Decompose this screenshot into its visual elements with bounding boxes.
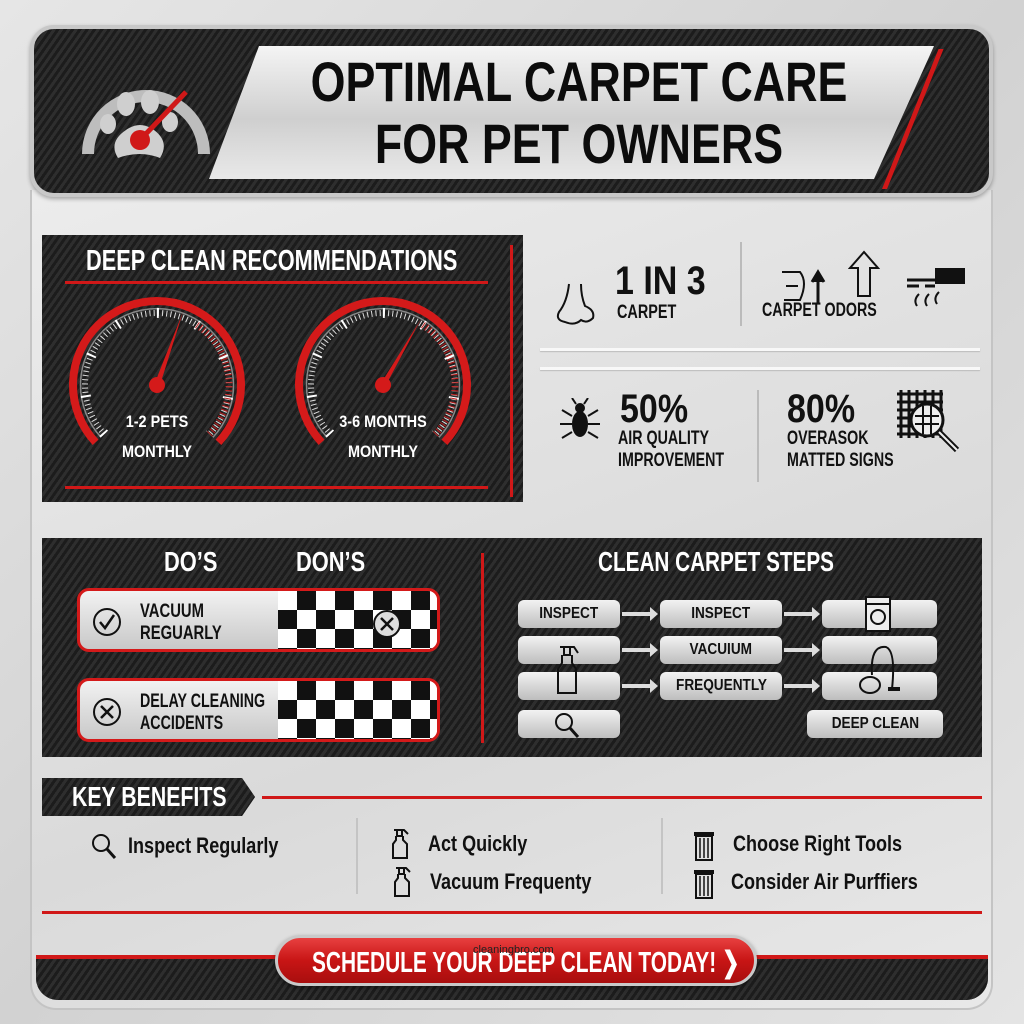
call to action button: cleaningbro.com (473, 944, 554, 956)
steps flow: INSPECT (692, 605, 750, 622)
don't item: delay cleaning accidents: ACCIDENTS (140, 713, 223, 734)
steps flow (518, 596, 943, 738)
gauge: 3-6 months (295, 297, 471, 461)
do item: vacuum regularly: REGUARLY (140, 623, 222, 644)
heading: do's / don's: DO’S (164, 546, 217, 577)
benefit: inspect regularly: Inspect Regularly (128, 833, 278, 858)
title: OPTIMAL CARPET CARE (311, 50, 847, 113)
title: FOR PET OWNERS (375, 112, 783, 175)
gauge: 1-2 pets: 1-2 PETS (126, 413, 188, 431)
footer strip (36, 955, 988, 1000)
icon: paw speedometer (82, 90, 210, 158)
icon: washing machine (865, 596, 891, 632)
stat: 50% (560, 387, 724, 471)
panel: do's and don'ts + steps: DON’S (296, 546, 365, 577)
gauge: 1-2 pets: MONTHLY (122, 443, 192, 461)
do item: vacuum regularly (77, 588, 440, 652)
steps flow: VACUIUM (690, 641, 752, 658)
panel: key benefits list (92, 818, 918, 899)
stat: 50%: 50% (620, 387, 688, 431)
panel: deep clean recommendations (42, 235, 523, 502)
benefit: tools / air purifiers: Choose Right Tools (733, 831, 902, 856)
gauge: 3-6 months: MONTHLY (348, 443, 418, 461)
don't item: delay cleaning accidents: DELAY CLEANING (140, 691, 265, 712)
call to action button: SCHEDULE YOUR DEEP CLEAN TODAY! ❯ (312, 947, 739, 979)
benefit: act quickly / vacuum frequently (392, 829, 592, 897)
stat: 80%: MATTED SIGNS (787, 450, 894, 471)
benefit: tools / air purifiers (694, 831, 918, 899)
red slash (882, 49, 944, 189)
benefit: act quickly / vacuum frequently: Act Quickly (428, 831, 527, 856)
stat: 1 in 3: CARPET (617, 302, 676, 323)
steps flow: INSPECT (540, 605, 598, 622)
benefit: act quickly / vacuum frequently: Vacuum Frequenty (430, 869, 591, 894)
heading: key benefits tab (42, 778, 255, 816)
icon: magnifier (555, 713, 579, 738)
stat: carpet odors (762, 250, 965, 321)
steps flow: FREQUENTLY (676, 677, 766, 694)
panel: stats (540, 242, 980, 482)
steps flow: DEEP CLEAN (831, 715, 919, 732)
panel: do's and don'ts + steps (42, 538, 982, 757)
stat: 80%: 80% (787, 387, 855, 431)
icon: spray bottle (557, 646, 579, 694)
heading: clean carpet steps: CLEAN CARPET STEPS (598, 546, 834, 577)
gauge: 3-6 months: 3-6 MONTHS (339, 413, 427, 431)
title (311, 50, 847, 175)
outer light frame (30, 190, 993, 1010)
stat: 80%: OVERASOK (787, 428, 869, 449)
don't item: delay cleaning accidents (77, 678, 440, 742)
stat: 80% (787, 387, 960, 471)
benefit: tools / air purifiers: Consider Air Purffiers (731, 869, 918, 894)
heading: key benefits tab: KEY BENEFITS (72, 781, 227, 812)
silver title plate (209, 46, 934, 179)
stat: 50%: AIR QUALITY (618, 428, 709, 449)
stat: 1 in 3 (556, 259, 706, 325)
stat: carpet odors: CARPET ODORS (762, 300, 877, 321)
gauge: 1-2 pets (69, 297, 245, 461)
stat: 1 in 3: 1 IN 3 (615, 259, 706, 303)
stat: 50%: IMPROVEMENT (618, 450, 724, 471)
header banner (30, 25, 993, 197)
call to action button (275, 935, 757, 986)
icon: vacuum cleaner (859, 646, 900, 694)
do item: vacuum regularly: VACUUM (140, 601, 204, 622)
heading: DEEP CLEAN RECOMMENDATIONS (86, 245, 457, 277)
